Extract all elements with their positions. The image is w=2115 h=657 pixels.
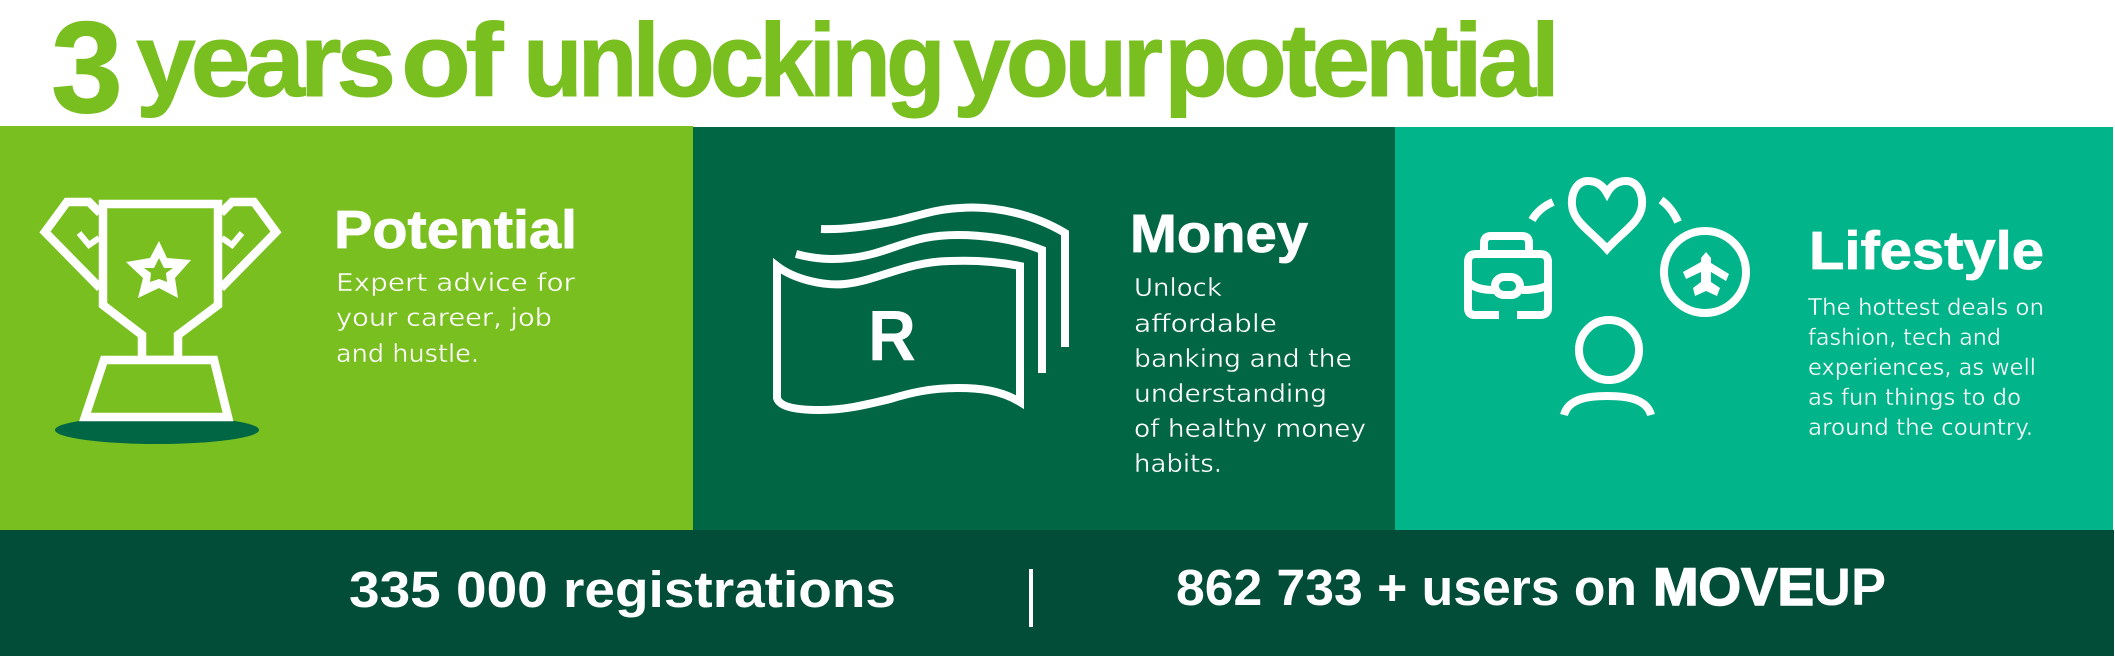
text: money description: habits. xyxy=(1134,449,1222,478)
icon: lifestyle cluster xyxy=(1468,181,1746,415)
divider xyxy=(1029,569,1033,627)
title: potential xyxy=(1164,3,1555,119)
title: your xyxy=(953,3,1162,119)
icon: heart xyxy=(1572,181,1642,249)
stat: users on MoveUp: MOVE xyxy=(1653,558,1814,617)
icon: briefcase xyxy=(1468,236,1548,315)
text: money description: banking and the xyxy=(1134,344,1352,373)
stat: users on MoveUp: 862 733 + users on xyxy=(1176,559,1637,616)
icon: person xyxy=(1564,320,1651,415)
text: money description: affordable xyxy=(1134,309,1277,338)
text: lifestyle description: The hottest deals on xyxy=(1807,295,2044,321)
text: money description: of healthy money xyxy=(1134,414,1366,443)
title: unlocking xyxy=(523,3,941,119)
title: years xyxy=(136,3,392,119)
text: potential description xyxy=(336,268,576,368)
icon: connecting arc left xyxy=(1532,202,1553,220)
icon: connecting arc right xyxy=(1661,200,1678,222)
text: potential description: and hustle. xyxy=(336,339,479,368)
text: potential description: Expert advice for xyxy=(336,268,576,297)
stat: users on MoveUp xyxy=(1176,558,1886,617)
icon: trophy xyxy=(45,202,276,444)
icon: plane in circle xyxy=(1664,231,1746,313)
text: money description xyxy=(1134,273,1366,478)
heading: potential: Potential xyxy=(334,200,577,260)
text: money description: understanding xyxy=(1134,379,1327,408)
icon: banknotes: R xyxy=(868,297,916,376)
title xyxy=(51,0,1555,140)
text: lifestyle description: experiences, as well xyxy=(1808,355,2036,381)
heading: money: Money xyxy=(1130,204,1308,264)
stats bar xyxy=(0,530,2114,656)
stat: users on MoveUp: UP xyxy=(1813,558,1886,617)
text: money description: Unlock xyxy=(1134,273,1223,302)
text: potential description: your career, job xyxy=(336,303,552,332)
title: of xyxy=(401,3,504,119)
text: lifestyle description: as fun things to do xyxy=(1808,385,2021,411)
panel: lifestyle xyxy=(1395,127,2113,531)
stat: registrations: 335 000 registrations xyxy=(349,561,896,618)
panel: money xyxy=(693,127,1395,531)
icon: banknotes xyxy=(777,207,1065,410)
text: lifestyle description: fashion, tech and xyxy=(1808,325,2001,351)
heading: lifestyle: Lifestyle xyxy=(1809,221,2044,281)
text: lifestyle description xyxy=(1807,295,2044,441)
panel: potential xyxy=(0,126,693,531)
text: lifestyle description: around the country. xyxy=(1808,415,2033,441)
